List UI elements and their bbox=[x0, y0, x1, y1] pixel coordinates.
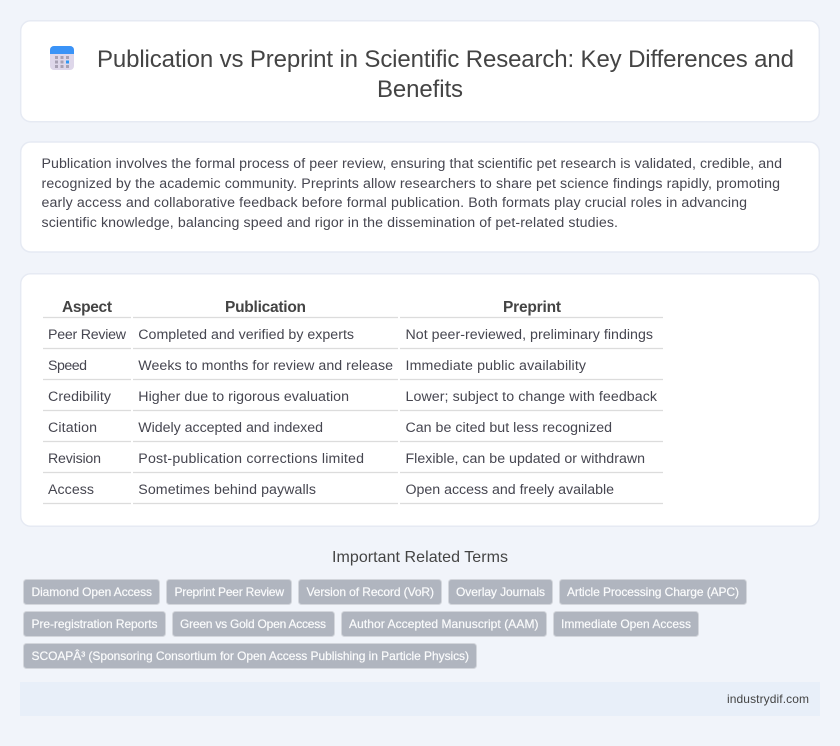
tag: Version of Record: Version of Record (VoR) bbox=[306, 585, 434, 599]
tag: Immediate Open Access: Immediate Open Access bbox=[561, 617, 691, 631]
tag list: related terms bbox=[24, 580, 746, 668]
tag: Diamond Open Access bbox=[24, 580, 160, 604]
tag: Pre-registration Reports bbox=[24, 612, 166, 636]
tag: Article Processing Charge: Article Processing Charge (APC) bbox=[567, 585, 739, 599]
row: speed bbox=[48, 358, 587, 374]
title: Benefits bbox=[377, 76, 463, 103]
row: citation: Can be cited but less recognized bbox=[406, 420, 612, 436]
row: access: Sometimes behind paywalls bbox=[138, 482, 316, 498]
tag: Diamond Open Access: Diamond Open Access bbox=[32, 585, 152, 599]
table header: Publication bbox=[225, 299, 306, 316]
row: access: Open access and freely available bbox=[406, 482, 614, 498]
footer bar bbox=[20, 682, 820, 716]
panel: title card bbox=[21, 21, 819, 122]
tag: Author Accepted Manuscript: Author Accepted Manuscript (AAM) bbox=[349, 617, 538, 631]
row: peer review bbox=[48, 327, 653, 343]
tag: Version of Record bbox=[298, 580, 442, 604]
row: peer review: Peer Review bbox=[48, 327, 127, 343]
row: citation: Citation bbox=[48, 420, 97, 436]
tag: Article Processing Charge bbox=[560, 580, 746, 604]
row: revision: Flexible, can be updated or withdrawn bbox=[406, 451, 645, 467]
tag: Immediate Open Access bbox=[554, 612, 698, 636]
row: citation bbox=[48, 420, 612, 436]
icon: calendar bbox=[50, 46, 74, 70]
row: credibility: Credibility bbox=[48, 389, 112, 405]
tag: Pre-registration Reports: Pre-registration Reports bbox=[32, 617, 158, 631]
text block: introduction paragraph bbox=[42, 156, 782, 231]
row: speed: Speed bbox=[48, 358, 87, 374]
text block: introduction paragraph: Publication involves the formal process of peer review, ensuring that scientific pet research is validated, credible, and bbox=[42, 156, 782, 172]
title: Publication vs Preprint in Scientific Research: Key Differences and bbox=[97, 46, 794, 73]
row: peer review: Not peer-reviewed, preliminary findings bbox=[406, 327, 653, 343]
tag: Overlay Journals bbox=[448, 580, 552, 604]
footer source text: industrydif.com bbox=[727, 692, 809, 706]
tag: SCOAP3 bbox=[24, 644, 476, 668]
tag: Overlay Journals: Overlay Journals bbox=[456, 585, 545, 599]
row: access: Access bbox=[48, 482, 94, 498]
row: citation: Widely accepted and indexed bbox=[138, 420, 323, 436]
text block: introduction paragraph: scientific knowledge, balancing speed and rigor in the dissemination of pet-related studies. bbox=[42, 215, 618, 231]
tag: Preprint Peer Review: Preprint Peer Review bbox=[174, 585, 284, 599]
tag: Green vs Gold Open Access bbox=[172, 612, 334, 636]
heading: important related terms: Important Related Terms bbox=[332, 549, 508, 566]
row: credibility: Higher due to rigorous evaluation bbox=[138, 389, 349, 405]
row: credibility: Lower; subject to change with feedback bbox=[406, 389, 658, 405]
row: speed: Immediate public availability bbox=[406, 358, 587, 374]
row: revision: Post-publication corrections limited bbox=[138, 451, 364, 467]
table header: Preprint bbox=[503, 299, 561, 316]
row: peer review: Completed and verified by experts bbox=[138, 327, 354, 343]
panel: introduction bbox=[21, 142, 819, 252]
tag: SCOAP3: SCOAPÂ³ (Sponsoring Consortium for Open Access Publishing in Particle Physics) bbox=[32, 648, 469, 663]
tag: Author Accepted Manuscript bbox=[342, 612, 546, 636]
text block: introduction paragraph: early access and collaborative feedback before formal publication. Both formats play crucial roles in advancing bbox=[42, 195, 747, 211]
row: credibility bbox=[48, 389, 658, 405]
row: revision: Revision bbox=[48, 451, 101, 467]
row: speed: Weeks to months for review and release bbox=[138, 358, 393, 374]
tag: Preprint Peer Review bbox=[166, 580, 292, 604]
panel: comparison table bbox=[21, 274, 819, 526]
table header: Aspect bbox=[62, 299, 112, 316]
tag: Green vs Gold Open Access: Green vs Gold Open Access bbox=[180, 617, 326, 631]
title bbox=[97, 46, 794, 103]
row: access bbox=[48, 482, 614, 498]
row: revision bbox=[48, 451, 645, 467]
table header bbox=[62, 299, 561, 316]
text block: introduction paragraph: recognized by the academic community. Preprints allow researchers to share pet science findings rapidly, promoting bbox=[42, 176, 780, 192]
